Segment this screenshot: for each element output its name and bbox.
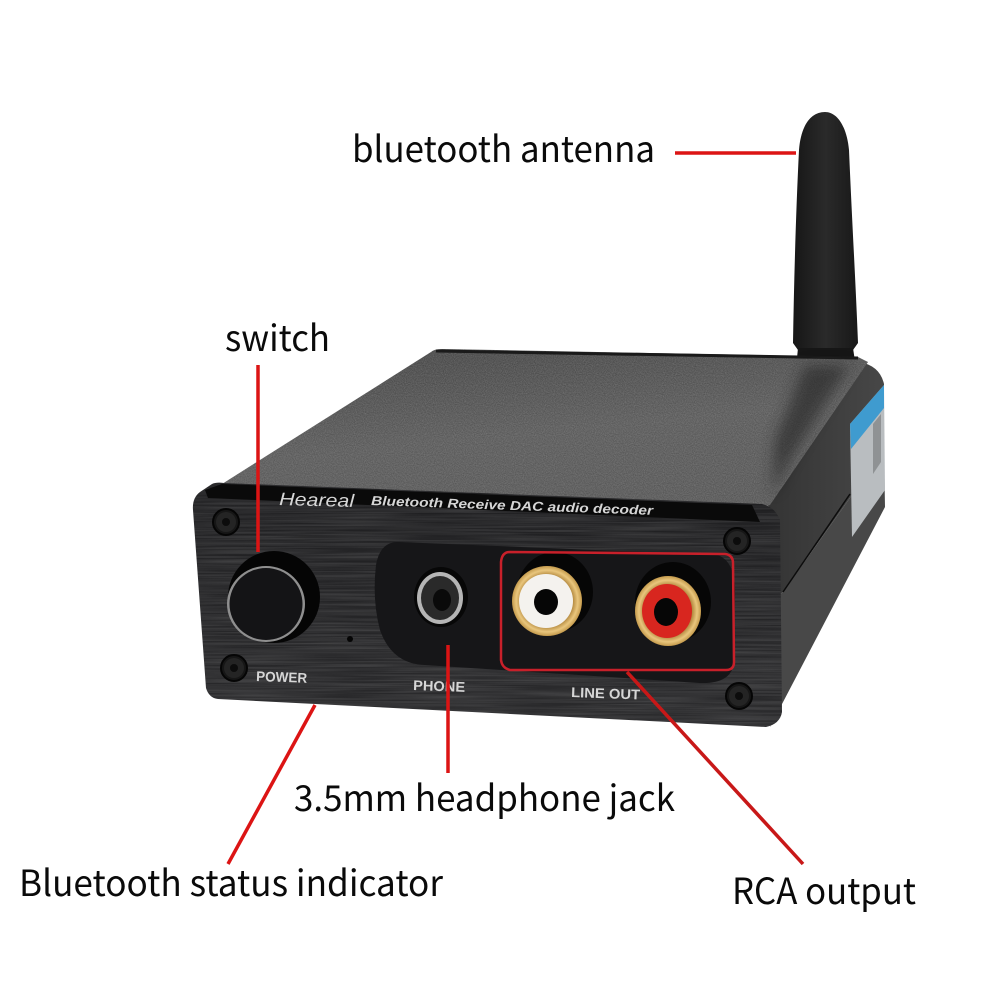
arrow: switch leader — [256, 365, 260, 552]
panel labels — [256, 668, 641, 702]
product name: Bluetooth Receive DAC audio decoder — [371, 493, 654, 518]
screws — [213, 509, 752, 709]
side label sticker — [850, 385, 885, 537]
product: Bluetooth DAC decoder — [193, 112, 885, 727]
side seam — [783, 494, 850, 592]
RCA highlight box — [501, 552, 734, 670]
black band with brand text — [205, 484, 760, 522]
arrow: RCA output leader — [627, 672, 803, 864]
label: RCA output: RCA output — [732, 863, 916, 915]
arrow: headphone jack leader — [446, 645, 450, 773]
label: switch: switch — [225, 310, 330, 362]
label: Bluetooth status indicator: Bluetooth status indicator — [19, 855, 444, 907]
panel labels: PHONE — [413, 677, 465, 695]
panel labels: POWER — [256, 668, 307, 686]
antenna — [793, 112, 858, 368]
arrow: bluetooth status leader — [228, 705, 315, 864]
top face — [222, 349, 868, 508]
front panel — [193, 483, 782, 727]
brand name: Heareal — [279, 489, 356, 511]
arrow: bluetooth antenna leader — [675, 151, 796, 155]
side face upper — [762, 362, 884, 600]
headphone jack — [414, 567, 468, 627]
bluetooth status indicator hole — [347, 636, 353, 642]
panel labels: LINE OUT — [571, 684, 641, 702]
RCA left white — [512, 552, 593, 636]
recessed connector cavity — [375, 542, 735, 683]
label: 3.5mm headphone jack: 3.5mm headphone jack — [294, 770, 675, 822]
top-right soft shadow band under antenna — [772, 365, 850, 495]
power knob — [227, 551, 320, 643]
label: bluetooth antenna: bluetooth antenna — [352, 121, 655, 173]
RCA right red — [635, 562, 711, 646]
side face lower — [770, 450, 885, 727]
